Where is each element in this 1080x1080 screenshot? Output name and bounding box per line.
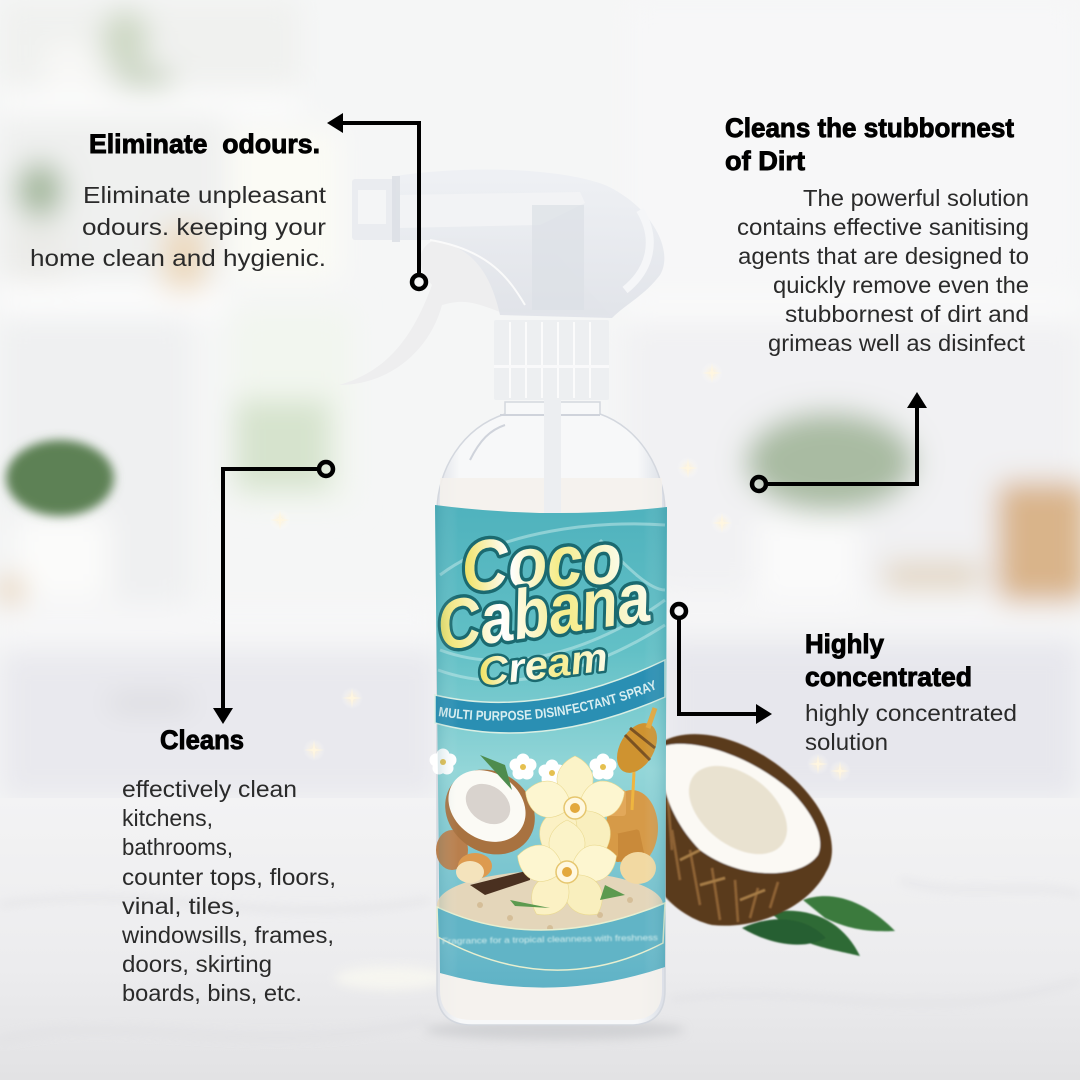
trigger head bbox=[339, 170, 664, 385]
cabana logo: Cabana bbox=[432, 558, 655, 665]
lower label band bbox=[437, 903, 665, 970]
text block: stubborn dirt: The powerful solution bbox=[803, 185, 1029, 211]
callout: cleans bbox=[121, 462, 336, 1006]
text block: concentrated: highly concentrated bbox=[805, 700, 1017, 726]
swirl lines bbox=[438, 524, 665, 681]
product type band bbox=[435, 660, 665, 733]
lower label text: Fragrance for a tropical cleanness with freshness bbox=[442, 932, 658, 946]
callout: eliminate odours bbox=[30, 113, 426, 289]
heading: stubborn dirt: of Dirt bbox=[725, 146, 805, 176]
collar bbox=[494, 320, 609, 400]
icon: coconut half bbox=[660, 734, 895, 956]
text block: stubborn dirt: stubbornest of dirt and bbox=[785, 301, 1029, 327]
arrow: concentrated bbox=[672, 604, 772, 724]
heading: concentrated: Highly bbox=[805, 629, 884, 659]
cream logo: Cream bbox=[476, 635, 610, 695]
text block: concentrated bbox=[805, 700, 1017, 755]
text block: cleans: bathrooms, bbox=[122, 834, 233, 860]
text block: eliminate odours: Eliminate unpleasant bbox=[83, 182, 327, 208]
liquid bbox=[440, 478, 662, 1020]
text block: stubborn dirt: contains effective sanitising bbox=[737, 214, 1029, 240]
label bbox=[430, 505, 667, 988]
coco logo: Coco bbox=[460, 519, 624, 607]
arrow: odours bbox=[327, 113, 426, 289]
product type text: MULTI PURPOSE DISINFECTANT SPRAY bbox=[438, 680, 655, 720]
text block: cleans: windowsills, frames, bbox=[121, 922, 334, 948]
glass body bbox=[437, 402, 665, 1025]
palm leaves bbox=[742, 896, 895, 956]
heading: concentrated: concentrated bbox=[805, 662, 972, 692]
text block: eliminate odours: home clean and hygienic. bbox=[30, 245, 326, 271]
text block: cleans: boards, bins, etc. bbox=[122, 980, 302, 1006]
callout: stubborn dirt bbox=[725, 113, 1029, 491]
text block: eliminate odours: odours. keeping your bbox=[82, 214, 326, 240]
heading: stubborn dirt: Cleans the stubbornest bbox=[725, 113, 1014, 143]
text block: stubborn dirt: grimeas well as disinfect bbox=[768, 330, 1026, 356]
text block: cleans: vinal, tiles, bbox=[122, 893, 241, 919]
text block: stubborn dirt: agents that are designed to bbox=[738, 243, 1029, 269]
label shading bbox=[435, 505, 667, 988]
ingredients illustration bbox=[429, 708, 665, 939]
text block: stubborn dirt: quickly remove even the bbox=[773, 272, 1029, 298]
text block: cleans: effectively clean bbox=[122, 776, 297, 802]
sparkles bbox=[269, 362, 851, 782]
product: spray bottle bbox=[352, 176, 667, 1024]
heading: concentrated bbox=[805, 629, 972, 692]
text block: eliminate odours bbox=[30, 182, 327, 271]
heading: eliminate odours: Eliminate odours. bbox=[89, 129, 320, 159]
text block: cleans: doors, skirting bbox=[122, 951, 272, 977]
arrow: dirt bbox=[752, 392, 927, 491]
heading: stubborn dirt bbox=[725, 113, 1014, 176]
arrow: cleans bbox=[213, 462, 333, 724]
text block: cleans bbox=[121, 776, 336, 1006]
dome highlights bbox=[470, 415, 600, 460]
text block: concentrated: solution bbox=[805, 729, 888, 755]
text block: stubborn dirt bbox=[737, 185, 1029, 356]
heading: cleans: Cleans bbox=[160, 725, 244, 755]
dip tube bbox=[544, 400, 561, 515]
text block: cleans: kitchens, bbox=[122, 805, 213, 831]
callout: highly concentrated bbox=[672, 604, 1017, 755]
text block: cleans: counter tops, floors, bbox=[122, 864, 336, 890]
